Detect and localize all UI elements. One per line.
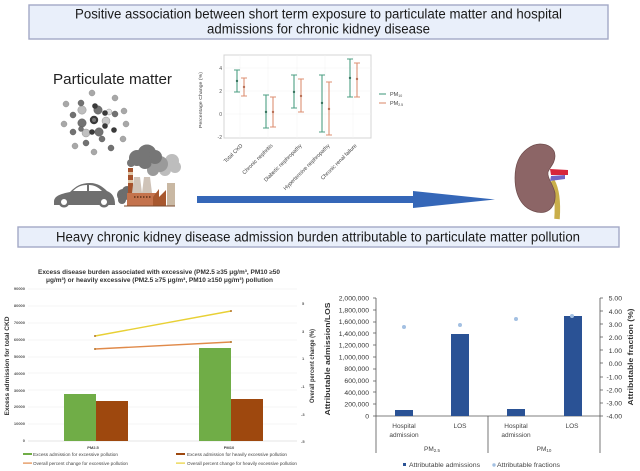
chart: attributable admissions and fractions: admission (501, 432, 531, 439)
chart: attributable admissions and fractions: 1,800,000 (339, 308, 369, 314)
chart: attributable admissions and fractions: 600,000 (344, 378, 369, 385)
chart: excess disease burden: 3 (302, 329, 305, 334)
chart: attributable admissions and fractions: -4.00 (606, 414, 622, 420)
chart: percentage change forest plot: Percentage Change (%) (198, 72, 204, 128)
chart legend: Overall percent change for heavily excessive pollution (187, 461, 298, 466)
chart: percentage change forest plot: 2 (219, 89, 222, 95)
chart: attributable admissions and fractions: 1,600,000 (339, 319, 369, 326)
heading: particulate matter: Particulate matter (53, 72, 172, 88)
chart: attributable admissions and fractions: PM (424, 446, 434, 453)
title banner (29, 5, 608, 39)
chart: excess disease burden: 10000 (14, 421, 26, 426)
chart legend: Attributable fractions (497, 462, 561, 469)
chart: attributable admissions and fractions: 800,000 (344, 366, 369, 373)
chart: percentage change forest plot: 0 (219, 112, 222, 118)
chart: excess disease burden: 30000 (14, 388, 26, 393)
chart: excess disease burden: 50000 (14, 354, 26, 359)
chart: attributable admissions and fractions: 1.00 (609, 348, 622, 355)
chart: percentage change forest plot (198, 55, 403, 192)
chart: percentage change forest plot: Diabetic nephropathy (263, 143, 304, 183)
chart: attributable admissions and fractions: admission (389, 432, 419, 439)
chart: percentage change forest plot: 4 (219, 66, 222, 72)
chart title (38, 269, 281, 284)
chart: attributable admissions and fractions: Attributable fraction (%) (628, 308, 635, 406)
chart: excess disease burden: 0 (23, 438, 26, 443)
chart: attributable admissions and fractions: -2.00 (606, 388, 622, 394)
chart: attributable admissions and fractions: Hospital (392, 423, 416, 430)
chart: excess disease burden: 60000 (14, 337, 26, 342)
chart: attributable admissions and fractions: PM (537, 446, 546, 453)
chart title: μg/m³) or heavily excessive (PM2.5 ≥75 μg/m³, PM10 ≥150 μg/m³) pollution (46, 277, 273, 284)
section banner (18, 227, 619, 247)
chart: excess disease burden: 40000 (14, 371, 26, 376)
chart: attributable admissions and fractions: 0 (365, 414, 369, 420)
section banner: Heavy chronic kidney disease admission burden attributable to particulate matter pollution (56, 230, 580, 244)
chart: excess disease burden: Excess admission for total CKD (4, 316, 11, 416)
chart: attributable admissions and fractions: Attributable admission/LOS (325, 302, 332, 416)
icon: factory with smoke (117, 144, 181, 206)
chart legend (403, 462, 561, 469)
chart: excess disease burden: -5 (301, 439, 305, 444)
chart: excess disease burden: 90000 (14, 286, 26, 291)
chart: excess disease burden: 80000 (14, 303, 26, 308)
chart: excess disease burden (4, 269, 316, 466)
chart: percentage change forest plot: PM (390, 92, 398, 98)
chart legend: Excess admission for heavily excessive pollution (187, 452, 288, 457)
chart title: Excess disease burden associated with excessive (PM2.5 ≥35 μg/m³, PM10 ≥50 (38, 269, 281, 276)
chart: attributable admissions and fractions: 400,000 (344, 390, 369, 397)
chart: attributable admissions and fractions: 2,000,000 (339, 296, 369, 302)
chart: attributable admissions and fractions: -3.00 (606, 400, 622, 408)
chart: percentage change forest plot: Chronic nephritis (242, 143, 275, 176)
icon: particles (61, 90, 129, 155)
chart: percentage change forest plot: Chronic renal failure (320, 143, 358, 182)
chart legend: Excess admission for excessive pollution (33, 452, 119, 457)
chart: attributable admissions and fractions: 200,000 (344, 402, 369, 408)
chart: excess disease burden: -3 (301, 412, 305, 417)
chart: percentage change forest plot: PM (390, 101, 398, 107)
arrow: exposure to kidney (197, 191, 495, 208)
chart: attributable admissions and fractions: 1,400,000 (339, 331, 369, 338)
chart: percentage change forest plot: -2 (218, 135, 222, 141)
chart: excess disease burden: 5 (302, 301, 305, 306)
chart: excess disease burden: 1 (302, 356, 305, 361)
chart: excess disease burden: 70000 (14, 320, 26, 325)
chart: percentage change forest plot: 10 (398, 94, 402, 98)
chart: attributable admissions and fractions: 2.00 (609, 335, 622, 342)
chart: percentage change forest plot: 2.5 (398, 103, 403, 107)
chart: excess disease burden: PM10 (224, 445, 235, 450)
chart: percentage change forest plot: Total CKD (223, 143, 244, 165)
chart: excess disease burden: 20000 (14, 404, 26, 409)
chart: excess disease burden: Overall percent change (%) (309, 329, 316, 403)
chart: excess disease burden: PM2.5 (87, 445, 100, 450)
chart: attributable admissions and fractions: LOS (453, 423, 467, 430)
chart: attributable admissions and fractions: 4.00 (609, 309, 622, 316)
chart: attributable admissions and fractions: Hospital (504, 423, 528, 430)
icon: car (54, 183, 115, 208)
chart: attributable admissions and fractions: 1,000,000 (339, 354, 369, 362)
chart legend: Overall percent change for excessive pollution (33, 461, 129, 466)
chart: attributable admissions and fractions: 5.00 (609, 296, 622, 302)
chart: attributable admissions and fractions: 2.5 (434, 448, 440, 453)
icon: kidney (515, 144, 568, 219)
chart: attributable admissions and fractions: -1.00 (606, 374, 622, 382)
chart: attributable admissions and fractions: 10 (546, 448, 552, 453)
chart legend (23, 452, 298, 466)
chart: attributable admissions and fractions: 3.00 (609, 322, 622, 329)
title banner: Positive association between short term exposure to particulate matter and hospital (75, 6, 562, 22)
chart: attributable admissions and fractions: 1,200,000 (339, 342, 369, 350)
chart legend: Attributable admissions (409, 462, 481, 469)
chart: attributable admissions and fractions (325, 296, 635, 469)
title banner: admissions for chronic kidney disease (207, 22, 430, 36)
chart: excess disease burden: -1 (301, 384, 305, 389)
chart: attributable admissions and fractions: 0.00 (609, 361, 622, 368)
chart: attributable admissions and fractions: LOS (565, 423, 579, 430)
chart: percentage change forest plot: Hypertensive nephropathy (283, 143, 332, 192)
